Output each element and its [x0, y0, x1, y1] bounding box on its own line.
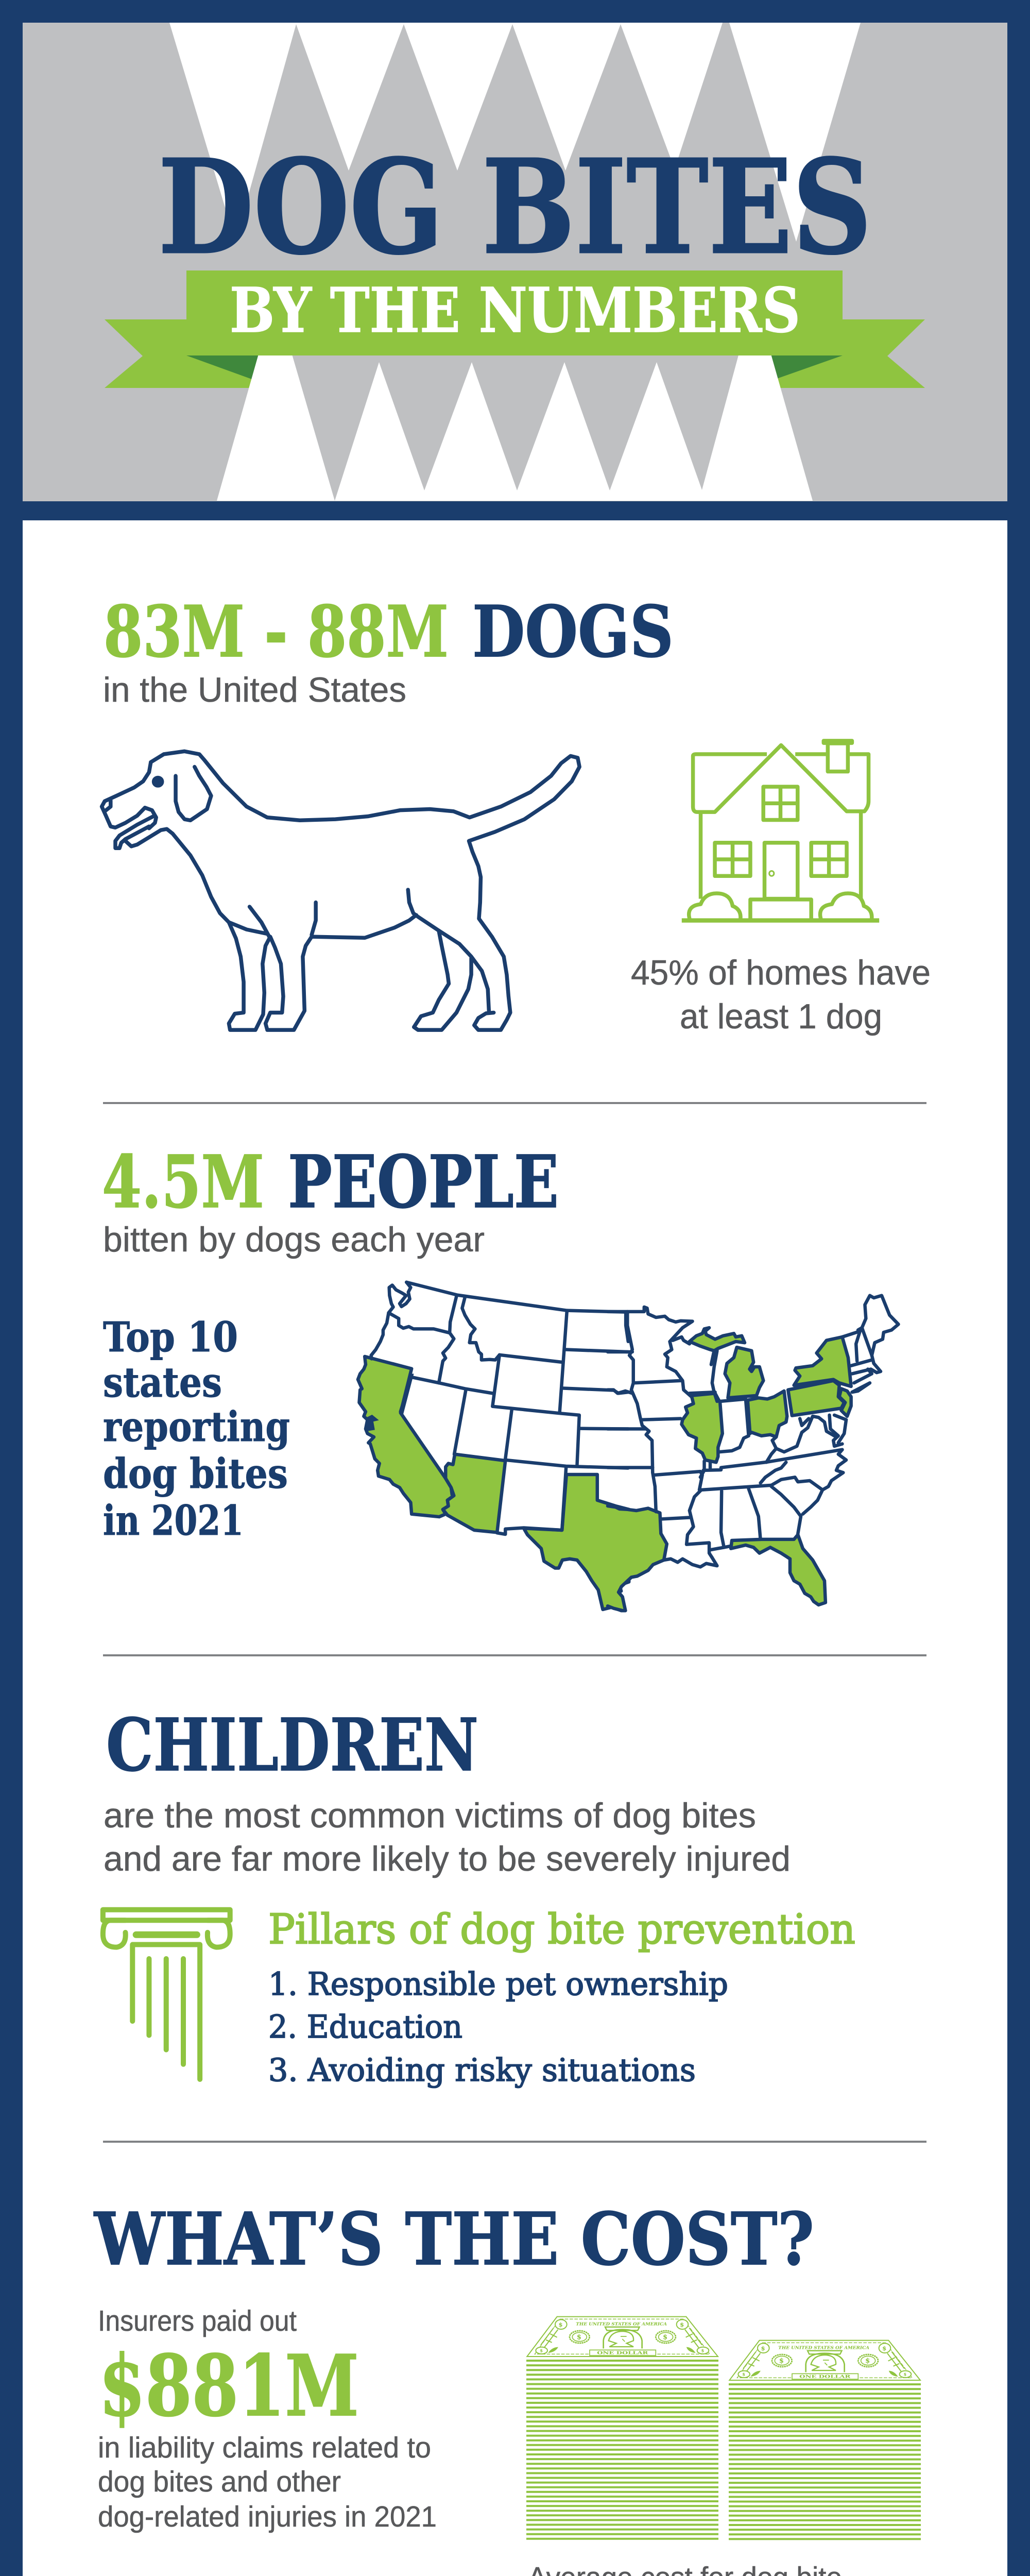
map east	[607, 1296, 898, 1611]
text: children description: are the most common victims of dog bites	[104, 1796, 756, 1835]
text: top 10 states: reporting	[103, 1402, 290, 1451]
text: top 10 states: states	[103, 1358, 222, 1406]
text: pillars of prevention	[268, 1905, 855, 2089]
text: insurers paid	[98, 2304, 437, 2533]
text: pillars of prevention: Pillars of dog bite prevention	[268, 1905, 855, 1953]
text: insurers paid: $881M	[99, 2337, 359, 2435]
bill: ONE DOLLAR	[597, 2350, 648, 2355]
icon: pillar	[103, 1910, 230, 2079]
text: insurers paid: Insurers paid out	[98, 2304, 297, 2337]
text: children description: and are far more likely to be severely injured	[104, 1839, 791, 1878]
icon: money stack 1	[527, 2317, 718, 2540]
bill: $	[761, 2345, 765, 2352]
bill: THE UNITED STATES OF AMERICA	[778, 2345, 869, 2350]
text: top 10 states: dog bites	[103, 1449, 288, 1498]
text: insurers paid: dog bites and other	[98, 2465, 341, 2498]
text: homes statistic: 45% of homes have	[631, 953, 931, 992]
text: bitten by dogs: bitten by dogs each year	[103, 1220, 485, 1259]
icon: standing dog	[102, 751, 579, 1030]
text: pillars of prevention: 1. Responsible pet ownership	[268, 1966, 728, 2003]
bill: $	[742, 2371, 745, 2377]
text: homes statistic	[631, 953, 931, 1036]
bill: $	[701, 2348, 704, 2353]
bill: $	[577, 2333, 581, 2341]
section: people heading	[102, 1140, 559, 1225]
text: homes statistic: at least 1 dog	[680, 997, 882, 1036]
upper teeth	[169, 23, 861, 242]
icon: house	[682, 741, 879, 923]
bill: $	[779, 2357, 784, 2365]
panel: white content	[23, 520, 1007, 2576]
section: dogs heading: 83M - 88M	[104, 590, 449, 673]
bill: $	[680, 2321, 684, 2328]
text: insurers paid: dog-related injuries in 2021	[98, 2500, 437, 2533]
text: pillars of prevention: 2. Education	[268, 2009, 462, 2045]
bill: ONE DOLLAR	[799, 2374, 851, 2379]
bill: $	[559, 2321, 563, 2328]
ribbon banner	[186, 270, 843, 355]
subtitle: BY THE NUMBERS	[230, 275, 800, 347]
bill	[729, 2341, 920, 2380]
bill: THE UNITED STATES OF AMERICA	[576, 2321, 667, 2326]
bill: $	[904, 2371, 906, 2377]
bill: $	[663, 2333, 667, 2341]
section: people heading: PEOPLE	[288, 1140, 559, 1225]
panel: header	[23, 23, 1007, 501]
text: children description	[104, 1796, 791, 1878]
title: DOG BITES	[158, 131, 872, 283]
text: in the United States: in the United States	[103, 670, 406, 709]
text: pillars of prevention: 3. Avoiding risky situations	[268, 2052, 696, 2089]
bill	[527, 2317, 718, 2357]
bill: $	[865, 2357, 870, 2365]
text: insurers paid: in liability claims related to	[98, 2431, 431, 2464]
map: United States top 10 states	[358, 1282, 898, 1611]
bill: $	[882, 2345, 886, 2352]
icon: money stack 2	[729, 2341, 920, 2540]
text: top 10 states: in 2021	[103, 1496, 244, 1545]
map west	[358, 1282, 629, 1611]
section: people heading: 4.5M	[102, 1140, 264, 1225]
section: dogs heading: DOGS	[472, 590, 674, 673]
heading: what's the cost: WHAT’S THE COST?	[93, 2197, 814, 2282]
text: top 10 states	[103, 1313, 290, 1545]
lower teeth	[217, 296, 813, 501]
ribbon tails	[105, 319, 925, 388]
heading: children: CHILDREN	[106, 1703, 478, 1788]
bill: $	[540, 2348, 543, 2353]
text: top 10 states: Top 10	[103, 1313, 238, 1361]
